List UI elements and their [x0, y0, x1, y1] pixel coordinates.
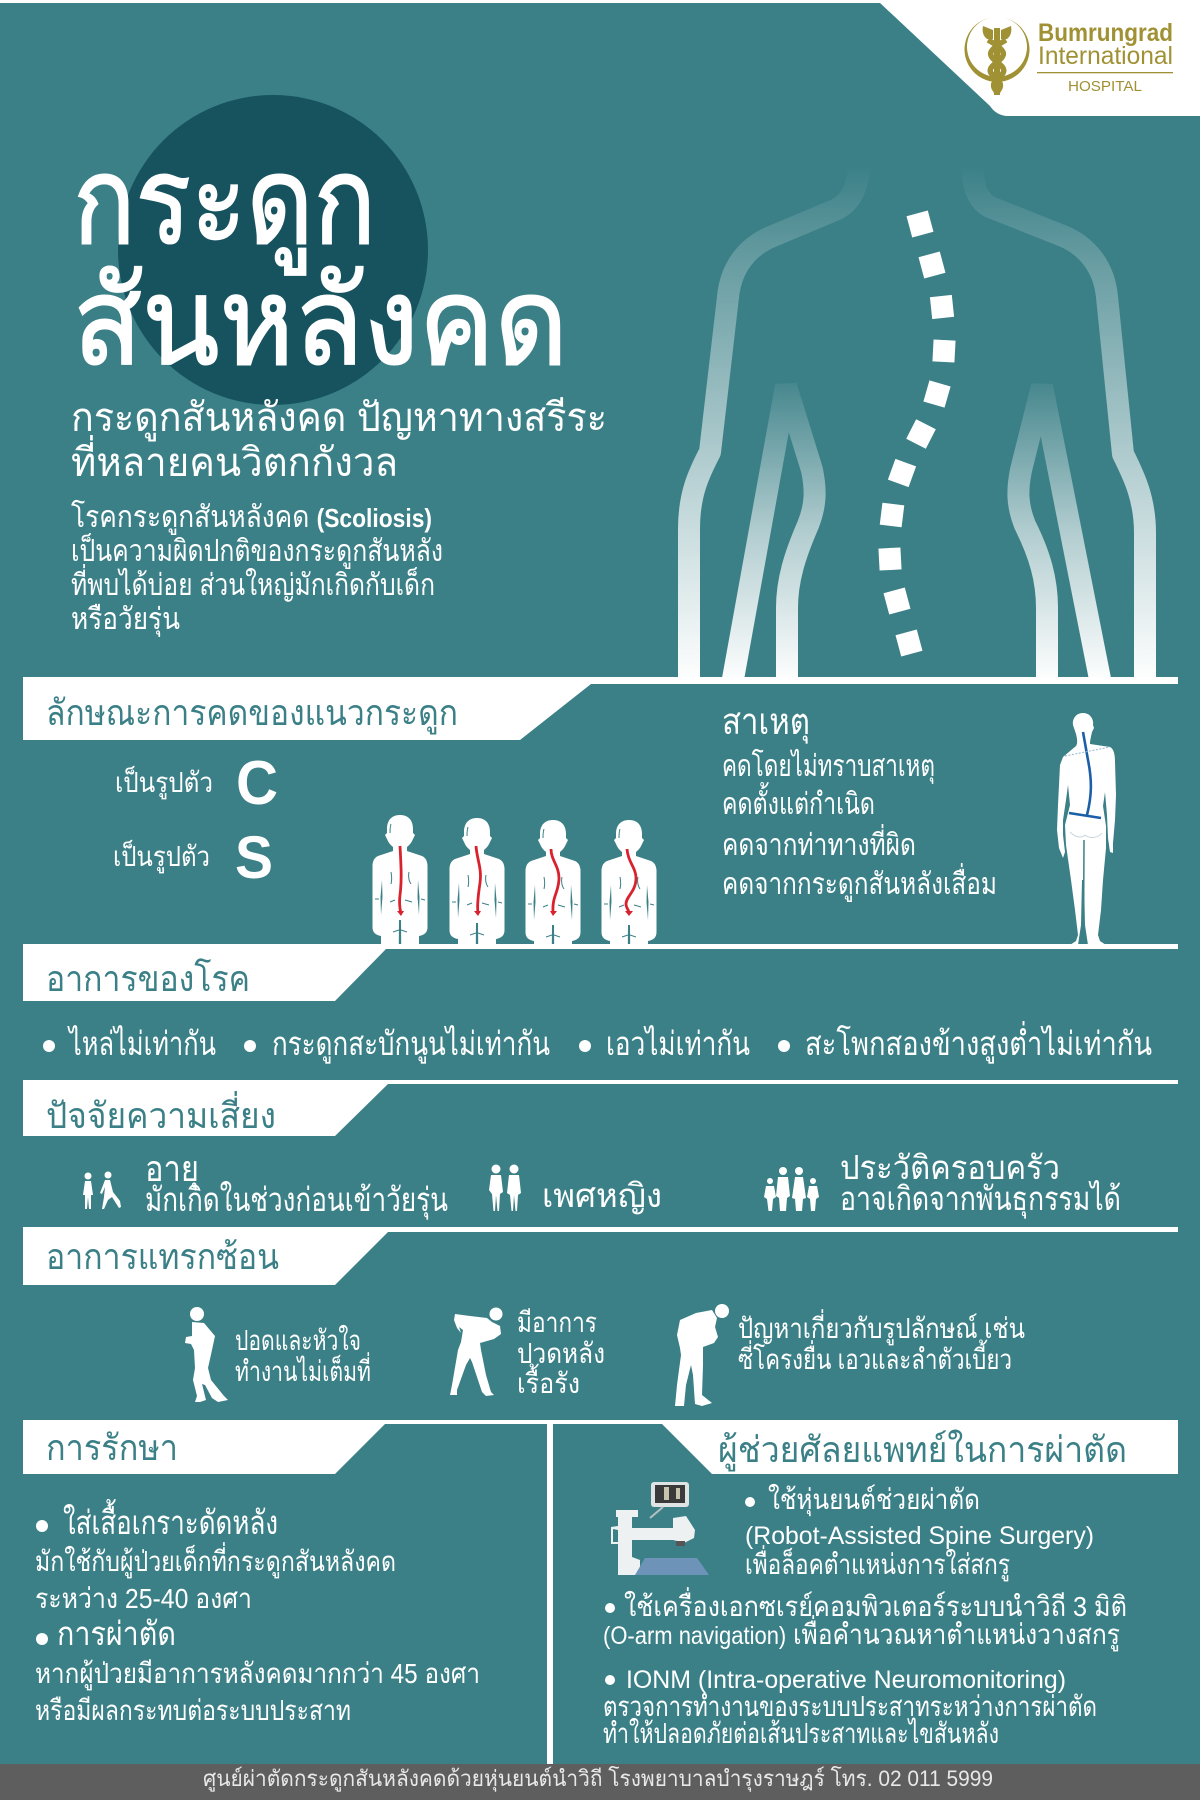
section: symptoms	[23, 944, 1178, 1064]
assistant: robot: ใช้หุ่นยนต์ช่วยผ่าตัด	[768, 1483, 980, 1517]
icon: surgical robot	[611, 1482, 709, 1575]
assistant: robot: เพื่อล็อคตำแหน่งการใส่สกรู	[745, 1545, 1010, 1582]
complication: chronic back pain: มีอาการ	[517, 1307, 597, 1338]
complication: appearance: ซี่โครงยื่น เอวและลำตัวเบี้ยว	[738, 1339, 1012, 1375]
footer bar	[0, 1764, 1200, 1800]
icon: children	[83, 1172, 121, 1209]
title: กระดูก	[73, 133, 376, 275]
heading: curve types: ลักษณะการคดของแนวกระดูก	[46, 692, 458, 735]
section: risk factors	[23, 1080, 1178, 1220]
icon: bent figure holding back	[450, 1308, 502, 1396]
symptom bullets: เอวไม่เท่ากัน	[606, 1025, 750, 1062]
symptom bullets: กระดูกสะบักนูนไม่เท่ากัน	[272, 1025, 550, 1064]
treatment: brace: ใส่เสื้อเกราะดัดหลัง	[63, 1499, 278, 1541]
heading: curve types	[23, 677, 1178, 740]
heading: surgical assistants	[553, 1420, 1178, 1474]
label: S shape: เป็นรูปตัว	[113, 839, 210, 874]
label: C shape: เป็นรูปตัว	[115, 765, 213, 800]
risk: female: เพศหญิง	[542, 1177, 662, 1214]
complication: lungs and heart: ปอดและหัวใจ	[235, 1324, 361, 1356]
assistant: O-arm navigation	[603, 1587, 1127, 1652]
risk: age: อายุ	[145, 1148, 199, 1191]
logo panel	[0, 0, 1200, 116]
subtitle: ที่หลายคนวิตกกังวล	[71, 435, 398, 485]
risk: age	[145, 1148, 448, 1220]
risk: family history	[840, 1149, 1121, 1219]
symptom bullets: ไหล่ไม่เท่ากัน	[67, 1025, 216, 1062]
subtitle: กระดูกสันหลังคด ปัญหาทางสรีระ	[71, 396, 607, 441]
intro paragraph: หรือวัยรุ่น	[71, 603, 180, 638]
label: S shape	[113, 824, 273, 891]
section: complications	[23, 1227, 1178, 1406]
treatment: surgery	[35, 1615, 480, 1726]
figure: back view with blue spine	[1057, 713, 1116, 945]
heading: complications	[23, 1227, 1178, 1285]
label: S shape: S	[235, 824, 273, 891]
illustration: back outline with curved spine	[689, 160, 1145, 679]
section: curve types	[23, 677, 1178, 949]
heading: complications: อาการแทรกซ้อน	[46, 1236, 279, 1277]
vertical divider	[547, 1420, 553, 1765]
section: treatment	[23, 1420, 1178, 1726]
footer bar: ศูนย์ผ่าตัดกระดูกสันหลังคดด้วยหุ่นยนต์นำวิถี โรงพยาบาลบำรุงราษฎร์ โทร. 02 011 5999	[203, 1766, 993, 1792]
icon: child silhouette	[185, 1307, 228, 1402]
complication: lungs and heart	[235, 1324, 371, 1387]
assistant: O-arm navigation: ใช้เครื่องเอกซเรย์คอมพิวเตอร์ระบบนำวิถี 3 มิติ	[624, 1587, 1127, 1622]
intro paragraph	[71, 499, 443, 638]
heading: symptoms	[23, 944, 1178, 1001]
treatment: brace: ระหว่าง 25-40 องศา	[35, 1583, 252, 1614]
icon: caduceus logo	[964, 18, 1029, 95]
intro paragraph: เป็นความผิดปกติของกระดูกสันหลัง	[71, 532, 443, 569]
curved spine vertebrae	[878, 211, 956, 656]
label: C shape	[115, 749, 278, 818]
heading: treatment: การรักษา	[46, 1427, 178, 1468]
complication: lungs and heart: ทำงานไม่เต็มที่	[235, 1352, 371, 1387]
intro paragraph: โรคกระดูกสันหลังคด (Scoliosis)	[71, 499, 432, 535]
causes list: คดจากท่าทางที่ผิด	[722, 824, 916, 862]
complication: chronic back pain	[517, 1307, 605, 1399]
risk: family history: ประวัติครอบครัว	[840, 1149, 1060, 1186]
logo text	[1037, 19, 1173, 95]
assistant: IONM: IONM (Intra-operative Neuromonitoring)	[626, 1666, 1066, 1694]
treatment: brace: มักใช้กับผู้ป่วยเด็กที่กระดูกสันหลังคด	[35, 1542, 396, 1579]
icon: family	[764, 1167, 819, 1211]
logo text: International	[1038, 42, 1173, 70]
causes list	[722, 701, 997, 902]
logo text: HOSPITAL	[1068, 78, 1142, 95]
title	[73, 133, 568, 390]
causes list: คดตั้งแต่กำเนิด	[722, 782, 875, 821]
assistant: O-arm navigation: (O-arm navigation) เพื่อคำนวณหาตำแหน่งวางสกรู	[603, 1615, 1120, 1652]
subtitle	[71, 396, 607, 485]
treatment: brace	[35, 1499, 396, 1614]
icon: leaning figure	[675, 1304, 729, 1406]
risk: age: มักเกิดในช่วงก่อนเข้าวัยรุ่น	[145, 1181, 448, 1220]
complication: chronic back pain: ปวดหลัง	[517, 1338, 605, 1369]
treatment: surgery: หรือมีผลกระทบต่อระบบประสาท	[35, 1695, 351, 1726]
symptom bullets	[43, 1021, 1152, 1064]
heading: risk factors: ปัจจัยความเสี่ยง	[46, 1091, 276, 1136]
label: C shape: C	[236, 749, 278, 818]
causes list: สาเหตุ	[722, 701, 810, 744]
causes list: คดโดยไม่ทราบสาเหตุ	[722, 748, 935, 785]
intro paragraph: ที่พบได้บ่อย ส่วนใหญ่มักเกิดกับเด็ก	[71, 564, 435, 602]
treatment: surgery: การผ่าตัด	[57, 1615, 176, 1652]
treatment: surgery: หากผู้ป่วยมีอาการหลังคดมากกว่า 45 องศา	[35, 1658, 480, 1691]
title: สันหลังคด	[73, 254, 568, 390]
risk: family history: อาจเกิดจากพันธุกรรมได้	[840, 1180, 1121, 1219]
complication: appearance	[738, 1309, 1025, 1375]
assistant: robot: (Robot-Assisted Spine Surgery)	[745, 1522, 1094, 1550]
section: surgical assistants	[553, 1420, 1178, 1749]
causes list: คดจากกระดูกสันหลังเสื่อม	[722, 863, 997, 902]
dark title circle	[118, 95, 428, 405]
heading: risk factors	[23, 1080, 1178, 1136]
assistant: IONM: ทำให้ปลอดภัยต่อเส้นประสาทและไขสันหลัง	[603, 1717, 999, 1749]
assistant: robot	[745, 1483, 1094, 1582]
figures with scoliosis curves	[372, 815, 656, 949]
heading: symptoms: อาการของโรค	[46, 958, 250, 999]
body outline strokes	[689, 160, 1145, 679]
assistant: IONM	[603, 1666, 1097, 1749]
complication: chronic back pain: เรื้อรัง	[517, 1363, 580, 1399]
logo text: Bumrungrad	[1038, 19, 1173, 47]
heading: treatment	[23, 1420, 1178, 1474]
complication: appearance: ปัญหาเกี่ยวกับรูปลักษณ์ เช่น	[738, 1309, 1025, 1346]
heading: surgical assistants: ผู้ช่วยศัลยแพทย์ในการผ่าตัด	[718, 1429, 1127, 1472]
icon: two women	[489, 1164, 521, 1211]
